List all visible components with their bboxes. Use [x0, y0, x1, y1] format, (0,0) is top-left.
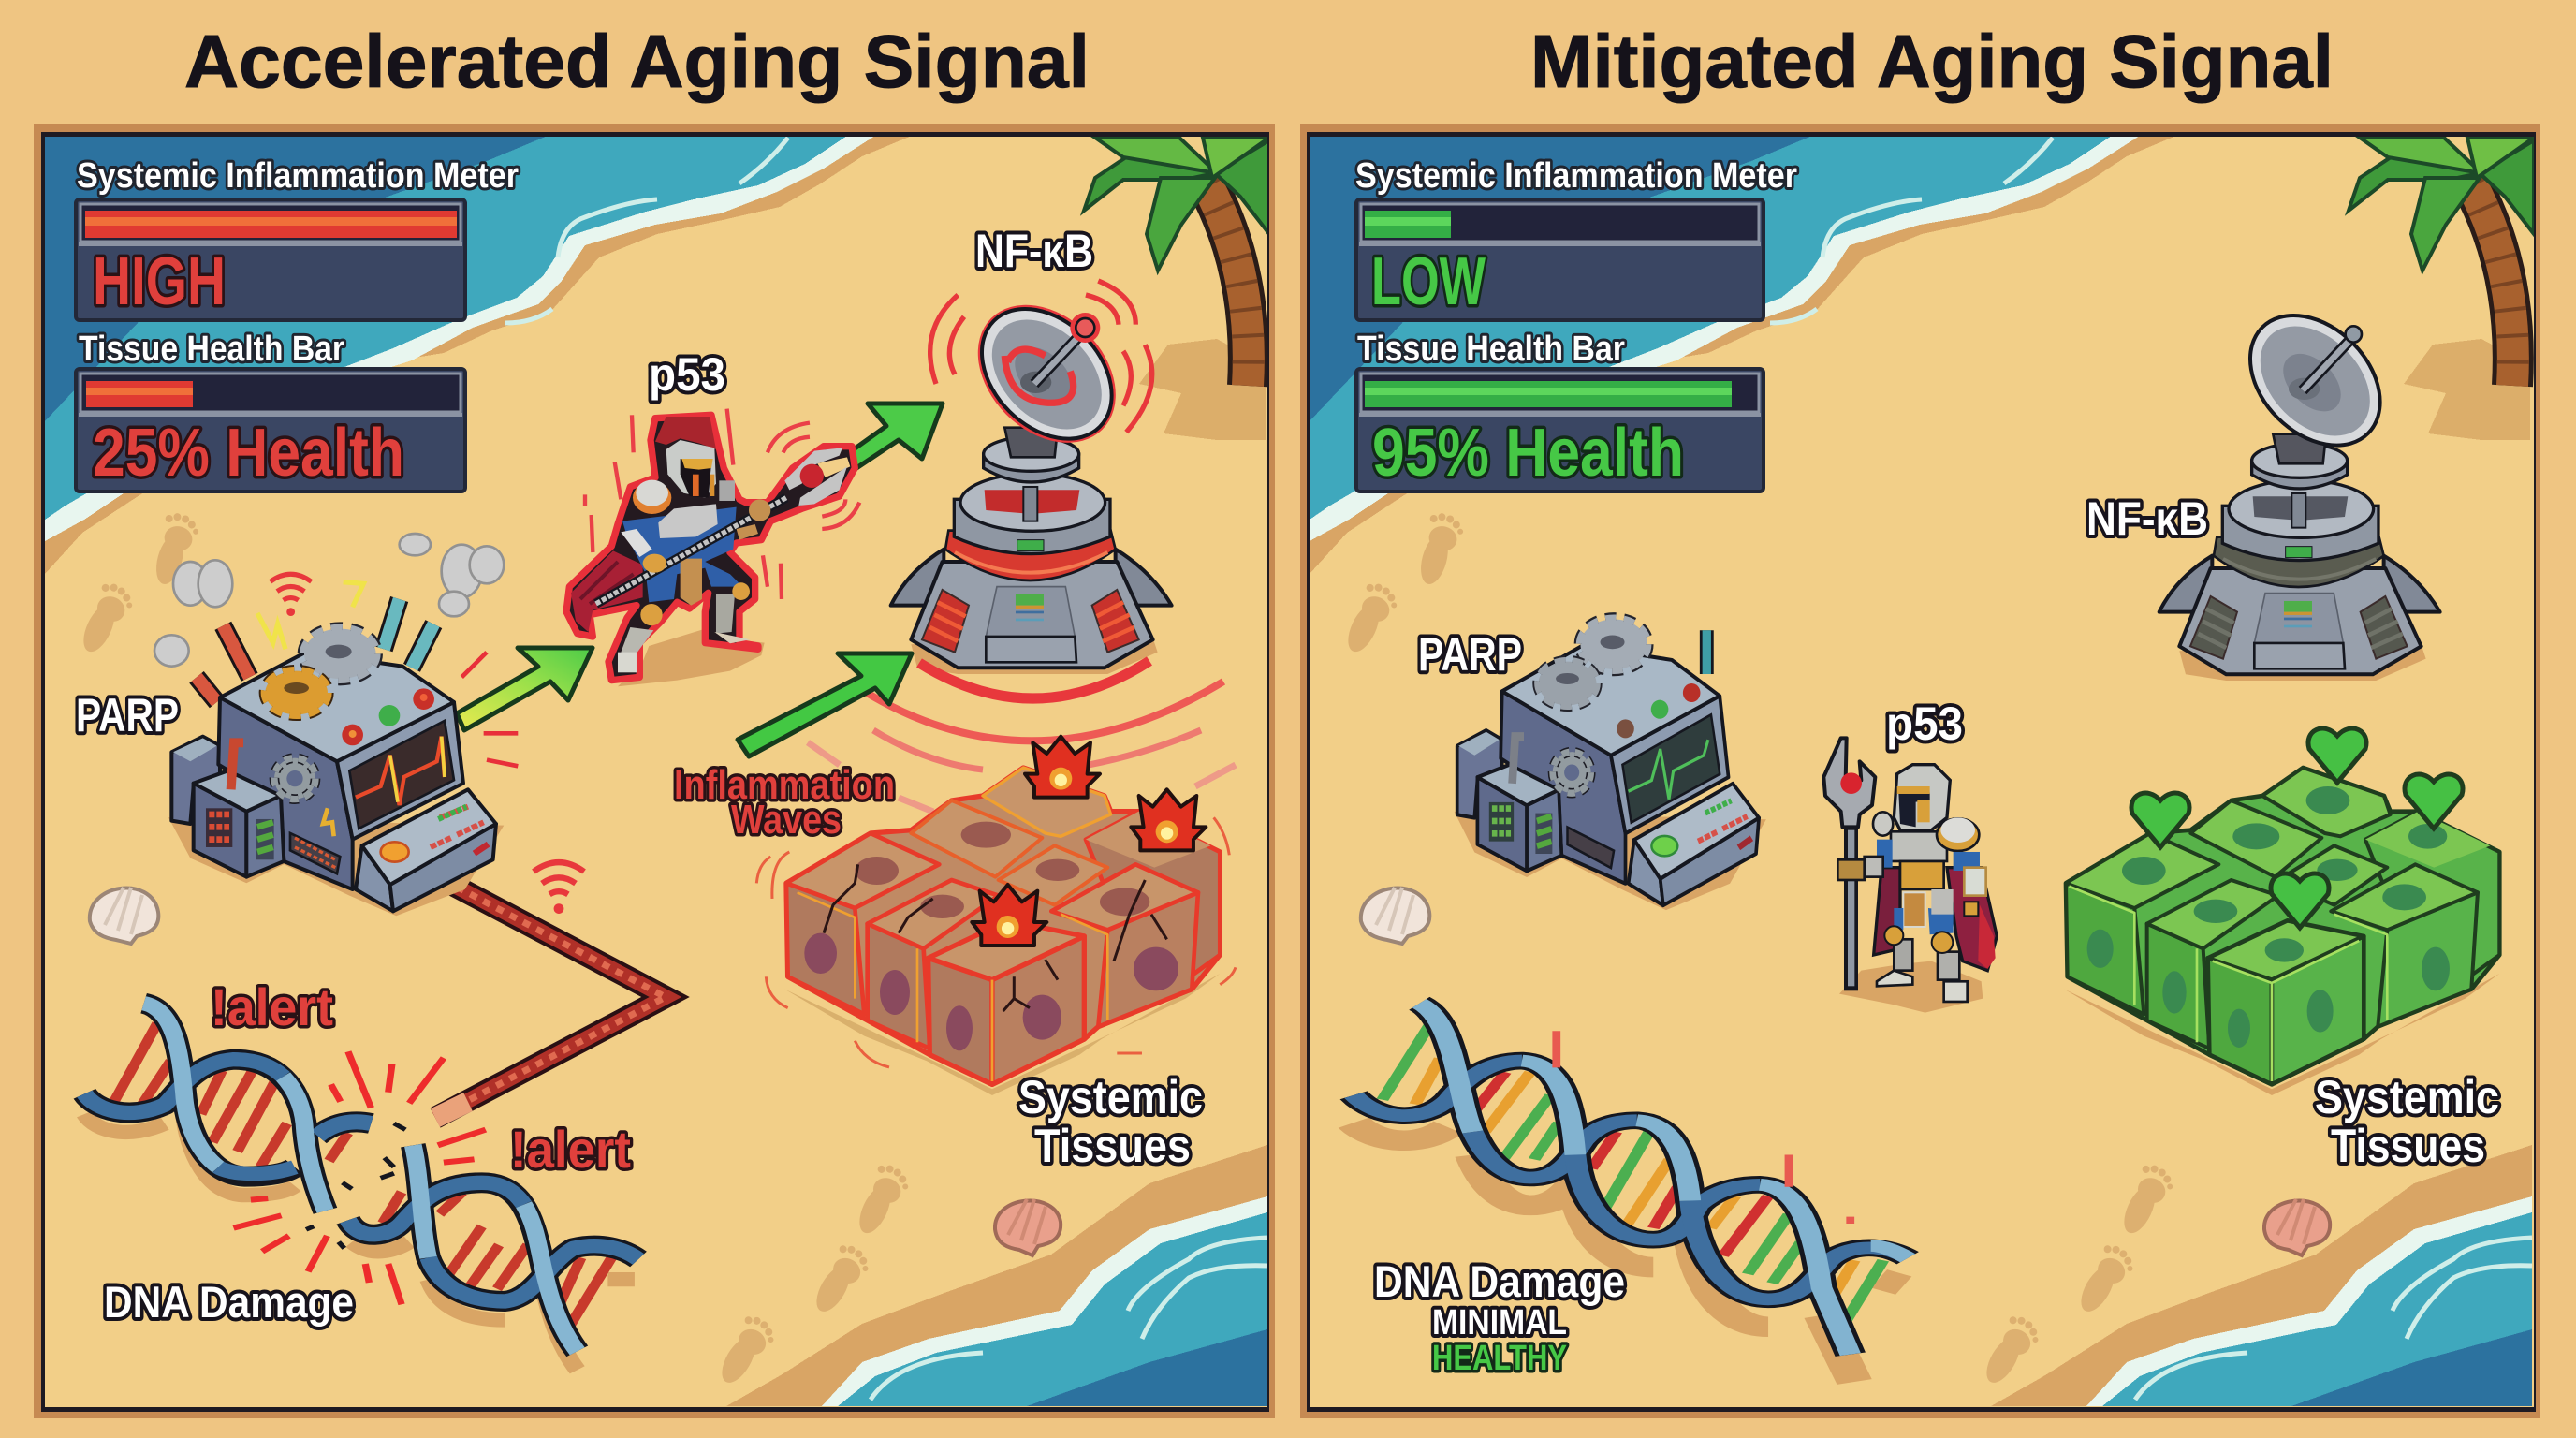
heart icon four — [2271, 873, 2329, 928]
health label: tissue health bar: Tissue Health Bar — [79, 330, 344, 369]
arrow: p53 to NF-kB — [847, 404, 943, 468]
label: inflammation waves: Waves — [731, 797, 842, 843]
heart icon two — [2405, 774, 2463, 829]
inflammation meter: high — [76, 199, 465, 320]
label: p53: p53 — [1886, 697, 1963, 750]
label: PARP: PARP — [76, 689, 179, 741]
label: p53: p53 — [649, 348, 725, 401]
icon: cracked inflamed tissue cubes — [756, 737, 1236, 1095]
panel: accelerated aging beach scene — [34, 124, 1275, 1418]
alert callout two: !alert — [510, 1120, 631, 1179]
arrow: tower activation — [738, 653, 912, 756]
health label: tissue health bar: Tissue Health Bar — [1357, 330, 1625, 369]
right green cube — [2331, 864, 2478, 1027]
icon: broken DNA helix — [84, 1004, 638, 1370]
label: Systemic Tissues — [2315, 1071, 2499, 1172]
title: Mitigated Aging Signal: Mitigated Aging Signal — [1530, 20, 2334, 103]
alert callout one: !alert — [211, 977, 333, 1036]
label: Systemic Tissues: Tissues — [2331, 1120, 2485, 1172]
inflammation meter: low — [1356, 199, 1764, 320]
flame on front cube — [972, 885, 1046, 946]
front tissue cube — [929, 920, 1084, 1084]
label: Systemic Tissues: Tissues — [1034, 1120, 1191, 1172]
front green cube — [2208, 920, 2364, 1084]
arrow: PARP to p53 — [457, 648, 593, 730]
icon: NF-kB tower, quiet — [2159, 290, 2440, 681]
label: Systemic Tissues — [1018, 1071, 1203, 1172]
label: Systemic Tissues: Systemic — [2315, 1071, 2499, 1123]
label: inflammation waves: Inflammation — [674, 762, 895, 808]
icon: intact DNA helix — [1354, 1004, 1908, 1382]
icon: wifi signal near cable — [534, 862, 584, 914]
label: DNA Damage: DNA Damage — [104, 1277, 354, 1327]
heart icon three — [2131, 793, 2189, 847]
icon: healthy green tissue cubes — [2064, 768, 2499, 1095]
icon: PARP machine, calm — [1455, 620, 1766, 910]
label: PARP: PARP — [1418, 628, 1522, 681]
tissue health bar: 95 percent: 95% Health — [1372, 416, 1684, 491]
icon: PARP machine, overloaded — [154, 534, 518, 916]
inflammation meter: high: HIGH — [93, 244, 226, 319]
cable: PARP to DNA damage — [435, 880, 666, 1118]
label: Systemic Tissues: Systemic — [1018, 1071, 1203, 1123]
tissue health bar: 95 percent — [1356, 369, 1764, 492]
title: Accelerated Aging Signal: Accelerated Aging Signal — [184, 20, 1090, 103]
label: DNA Damage: DNA Damage — [1374, 1256, 1625, 1306]
middle tissue cube — [868, 880, 999, 1049]
icon: p53 knight at rest — [1823, 738, 1997, 1013]
heart icon one — [2308, 728, 2366, 783]
tissue health bar: 25 percent — [76, 369, 465, 492]
flame on back cube — [1025, 737, 1100, 798]
inflammation meter: low: LOW — [1371, 244, 1486, 319]
icon: p53 knight attacking with red aura — [566, 409, 859, 686]
status: healthy: HEALTHY — [1432, 1339, 1567, 1378]
middle green cube — [2147, 880, 2278, 1049]
left green cube — [2066, 833, 2218, 1014]
icon: NF-kB signalling tower, active — [891, 278, 1172, 674]
tissue health bar: 25 percent: 25% Health — [93, 416, 404, 491]
label: inflammation waves — [674, 762, 895, 843]
status: minimal: MINIMAL — [1432, 1303, 1567, 1343]
meter label: systemic inflammation: Systemic Inflammation Meter — [77, 156, 519, 196]
panel: mitigated aging beach scene — [1300, 124, 2540, 1418]
left tissue cube — [786, 833, 939, 1014]
label: NF-kB: NF-κB — [2086, 492, 2208, 545]
right tissue cube — [1051, 864, 1198, 1027]
label: NF-kB: NF-κB — [975, 225, 1093, 277]
meter label: systemic inflammation: Systemic Inflammation Meter — [1355, 156, 1797, 196]
flame on right cube — [1131, 789, 1206, 850]
signal waves: inflammation rings under tower — [808, 661, 1236, 812]
